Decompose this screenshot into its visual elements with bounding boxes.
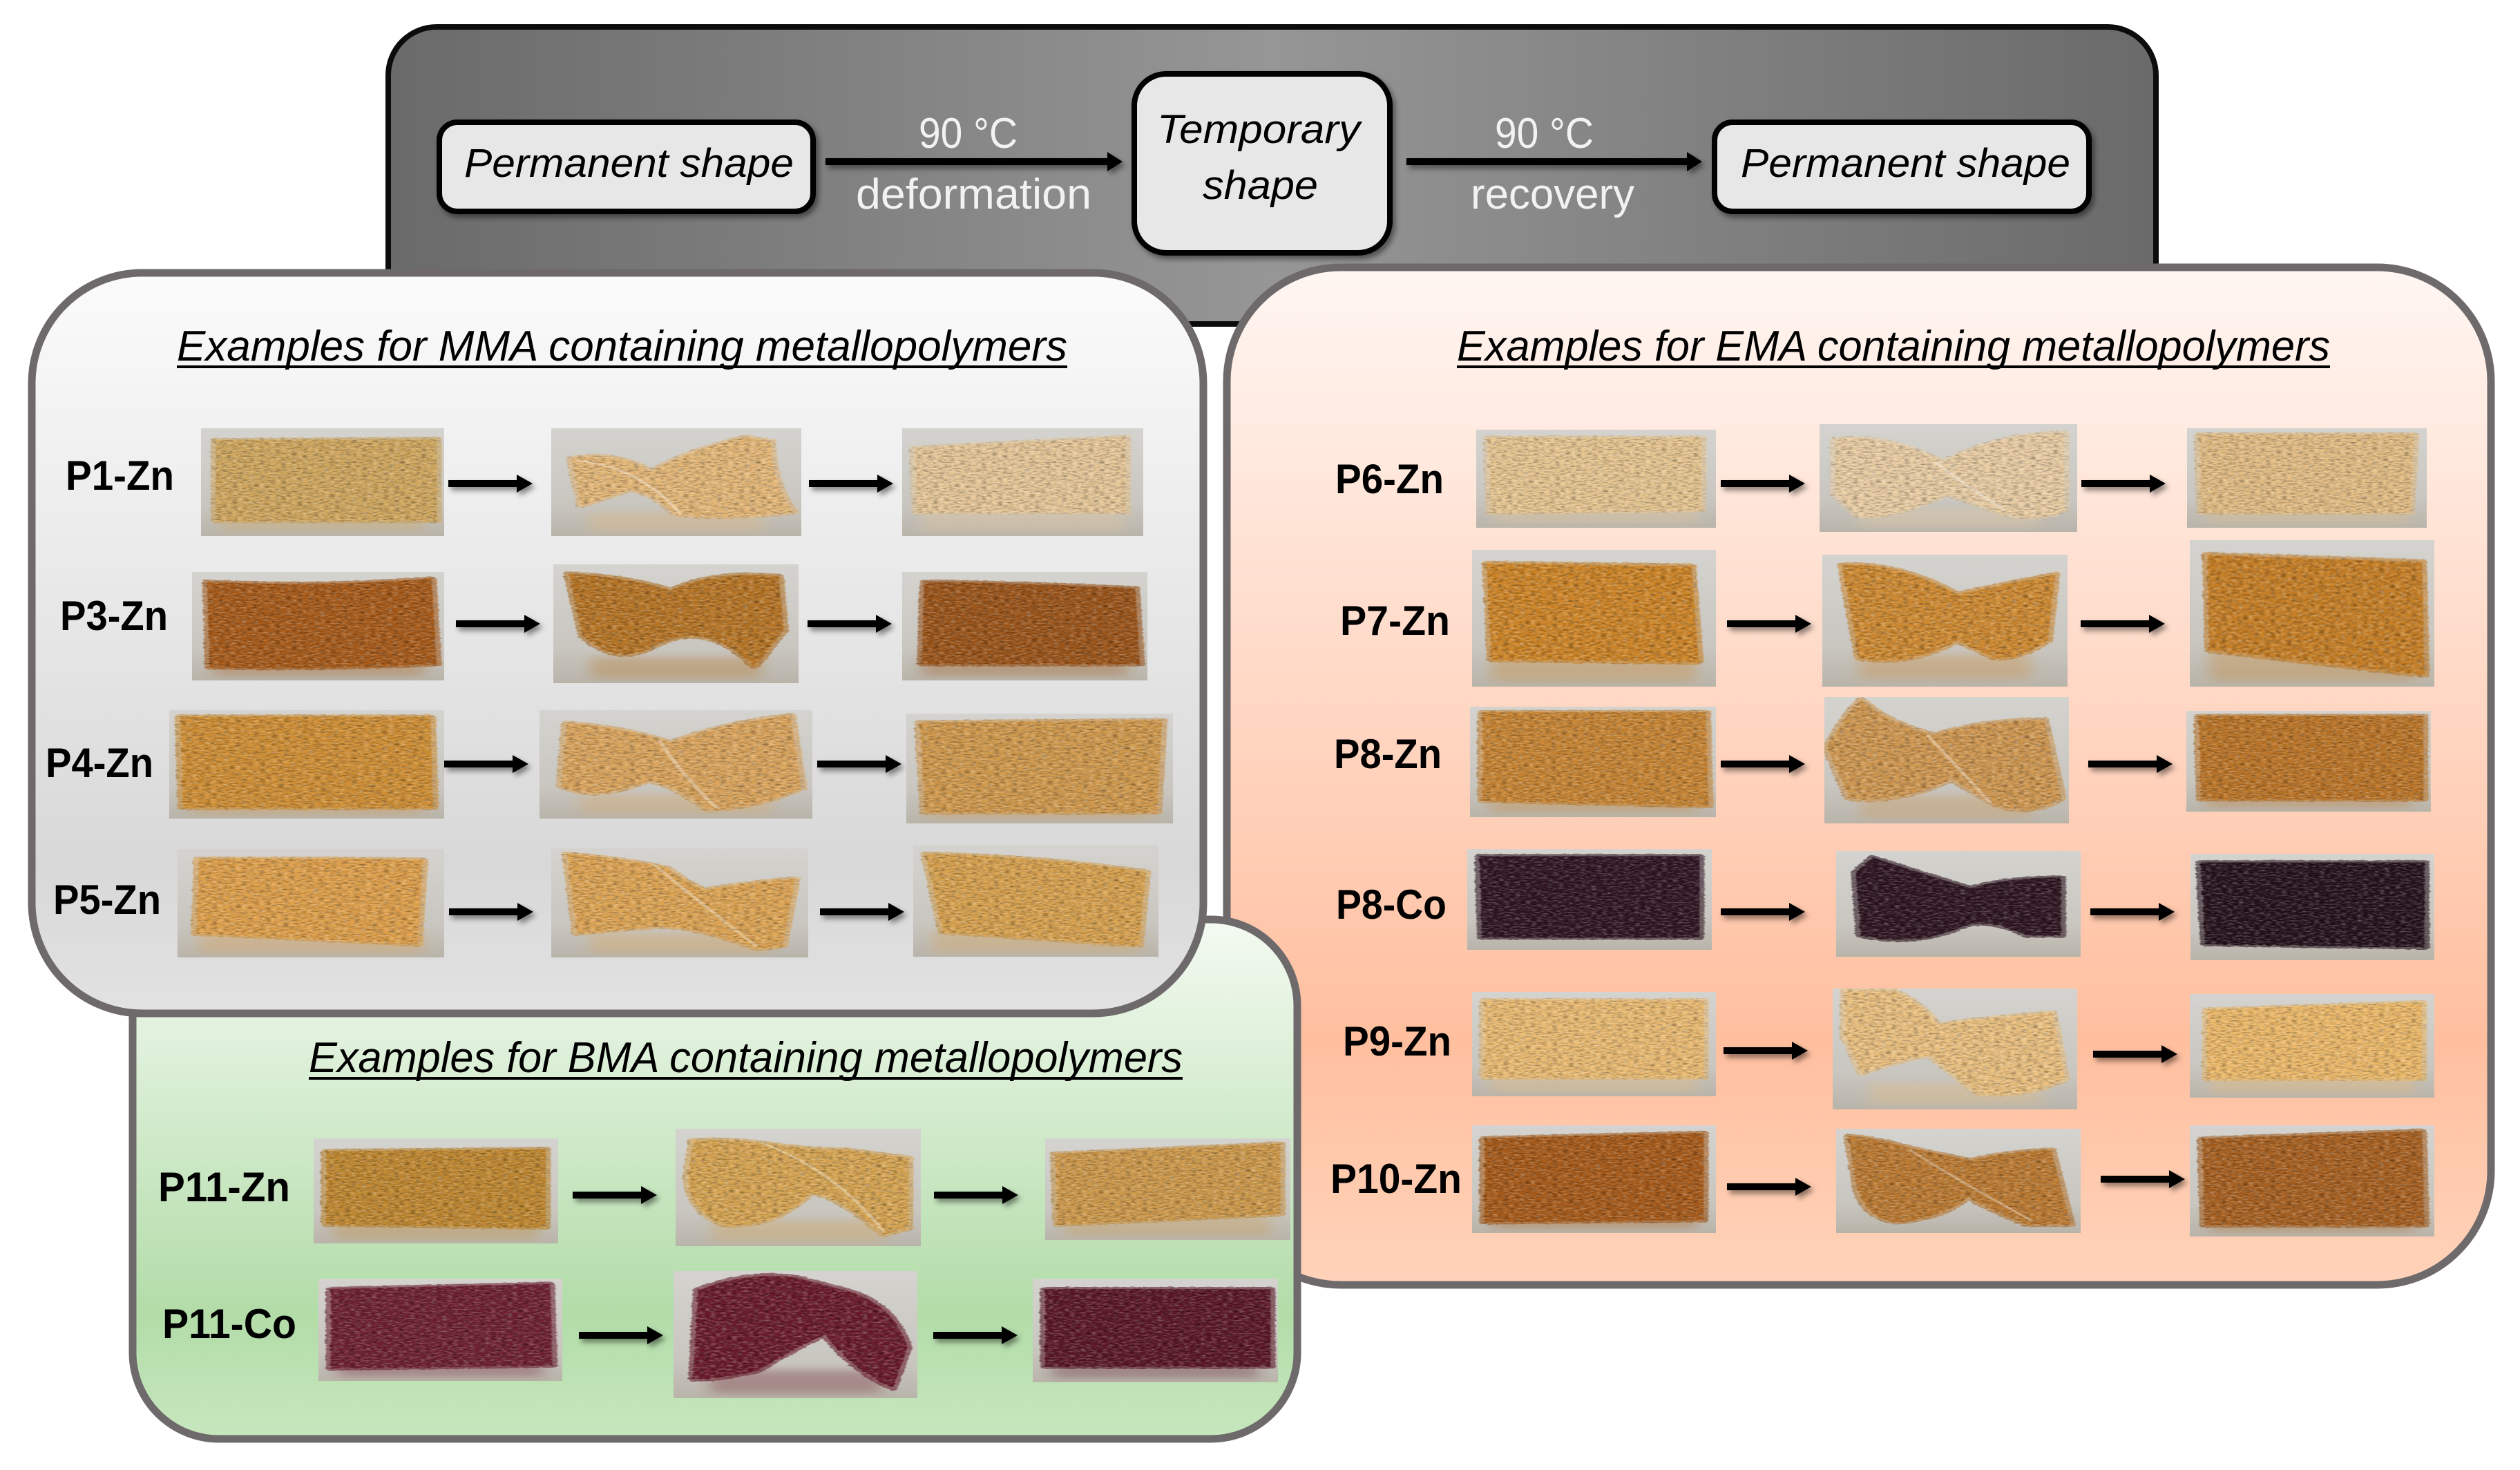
- label: 90 °C deformation: [856, 110, 1091, 218]
- label: P5-Zn: P5-Zn: [53, 877, 161, 923]
- arrow: deformation: [825, 152, 1123, 171]
- photo: P8-Zn twisted: [1824, 697, 2069, 823]
- photo: P6-Zn twisted: [1820, 424, 2077, 532]
- photo: P10-Zn permanent: [1472, 1125, 1716, 1233]
- label: P10-Zn: P10-Zn: [1330, 1156, 1462, 1202]
- photo: P6-Zn permanent: [1476, 430, 1716, 528]
- heading: BMA examples: Examples for BMA containing metallopolymers: [309, 1034, 1183, 1082]
- photo: P8-Zn recovered: [2186, 711, 2431, 812]
- photo: P1-Zn permanent: [201, 428, 444, 536]
- box: permanent shape (end): [1715, 122, 2089, 211]
- arrow: [1724, 1042, 1808, 1060]
- arrow: [934, 1186, 1018, 1204]
- arrow: [573, 1186, 657, 1204]
- label: 90 °C deformation: deformation: [856, 171, 1091, 218]
- photo: P11-Zn recovered: [1045, 1138, 1290, 1240]
- label: 90 °C recovery: [1471, 110, 1634, 218]
- photo: P8-Co recovered: [2190, 854, 2434, 960]
- photo: P11-Zn twisted: [676, 1129, 921, 1246]
- arrow: [2081, 475, 2166, 493]
- label: 90 °C deformation: 90 °C: [919, 110, 1018, 158]
- panel: BMA containing metallopolymers: [133, 919, 1297, 1439]
- heading: EMA examples: Examples for EMA containing metallopolymers: [1457, 323, 2330, 370]
- label: P11-Zn: P11-Zn: [158, 1164, 290, 1210]
- arrow: [1727, 1178, 1811, 1196]
- photo: P3-Zn twisted: [553, 564, 799, 683]
- label: P8-Co: P8-Co: [1336, 881, 1447, 928]
- label: 90 °C recovery: 90 °C: [1495, 110, 1594, 158]
- box: temporary shape: Temporary: [1157, 107, 1362, 152]
- panel: MMA containing metallopolymers: [32, 273, 1203, 1013]
- label: P11-Co: P11-Co: [162, 1301, 296, 1347]
- label: 90 °C recovery: recovery: [1471, 171, 1634, 218]
- arrow: [2090, 903, 2175, 921]
- photo: P7-Zn permanent: [1472, 550, 1716, 687]
- arrow: [809, 475, 893, 493]
- label: P3-Zn: P3-Zn: [60, 593, 168, 639]
- arrow: [1721, 903, 1805, 921]
- photo: P3-Zn recovered: [902, 572, 1147, 680]
- photo: P4-Zn recovered: [906, 714, 1173, 823]
- arrow: [448, 475, 533, 493]
- photo: P8-Co permanent: [1467, 849, 1712, 950]
- box: permanent shape (end): Permanent shape: [1741, 141, 2070, 186]
- photo: P5-Zn twisted: [551, 848, 808, 957]
- photo: P3-Zn permanent: [192, 572, 444, 680]
- label: P8-Zn: P8-Zn: [1334, 731, 1442, 777]
- photo: P1-Zn twisted: [551, 428, 801, 536]
- arrow: [2093, 1045, 2177, 1063]
- arrow: [1721, 755, 1805, 773]
- photo: P7-Zn recovered: [2190, 540, 2434, 687]
- photo: P4-Zn twisted: [540, 710, 812, 819]
- photo: P6-Zn recovered: [2187, 428, 2427, 528]
- arrow: [579, 1326, 663, 1344]
- arrow: recovery: [1406, 152, 1702, 171]
- photo: P11-Zn permanent: [314, 1138, 558, 1243]
- box: permanent shape (start): Permanent shape: [464, 141, 794, 186]
- panel: shape memory cycle: [388, 27, 2156, 324]
- arrow: [820, 903, 904, 921]
- arrow: [1721, 475, 1805, 493]
- arrow: [444, 755, 528, 773]
- photo: P10-Zn twisted: [1836, 1129, 2081, 1233]
- arrow: [2088, 755, 2173, 773]
- photo: P11-Co recovered: [1033, 1279, 1278, 1382]
- label: P9-Zn: P9-Zn: [1343, 1018, 1451, 1065]
- heading: MMA examples: Examples for MMA containing metallopolymers: [177, 323, 1067, 370]
- box: permanent shape (start): [439, 122, 813, 211]
- arrow: [2101, 1170, 2185, 1188]
- arrow: [456, 615, 540, 633]
- label: P1-Zn: P1-Zn: [66, 452, 174, 499]
- arrow: [808, 615, 892, 633]
- arrow: [449, 903, 533, 921]
- photo: P8-Co twisted: [1836, 851, 2081, 957]
- panel: EMA containing metallopolymers: [1227, 267, 2491, 1285]
- photo: P4-Zn permanent: [169, 710, 444, 819]
- photo: P5-Zn permanent: [178, 849, 444, 957]
- photo: P8-Zn permanent: [1470, 707, 1716, 817]
- box: temporary shape: shape: [1203, 163, 1318, 208]
- photo: P11-Co permanent: [318, 1279, 562, 1381]
- arrow: [1727, 615, 1811, 633]
- label: P7-Zn: P7-Zn: [1340, 598, 1450, 644]
- photo: P1-Zn recovered: [902, 428, 1143, 536]
- photo: P9-Zn recovered: [2190, 994, 2434, 1098]
- photo: P10-Zn recovered: [2190, 1125, 2434, 1237]
- arrow: [817, 755, 901, 773]
- box: temporary shape: [1134, 74, 1390, 253]
- arrow: [933, 1326, 1018, 1344]
- label: P6-Zn: P6-Zn: [1335, 456, 1444, 502]
- label: P4-Zn: P4-Zn: [46, 740, 153, 786]
- photo: P11-Co twisted: [674, 1271, 917, 1398]
- photo: P7-Zn twisted: [1822, 555, 2068, 687]
- photo: P5-Zn recovered: [913, 845, 1158, 957]
- photo: P9-Zn twisted: [1833, 989, 2077, 1109]
- photo: P9-Zn permanent: [1472, 992, 1716, 1096]
- arrow: [2081, 615, 2165, 633]
